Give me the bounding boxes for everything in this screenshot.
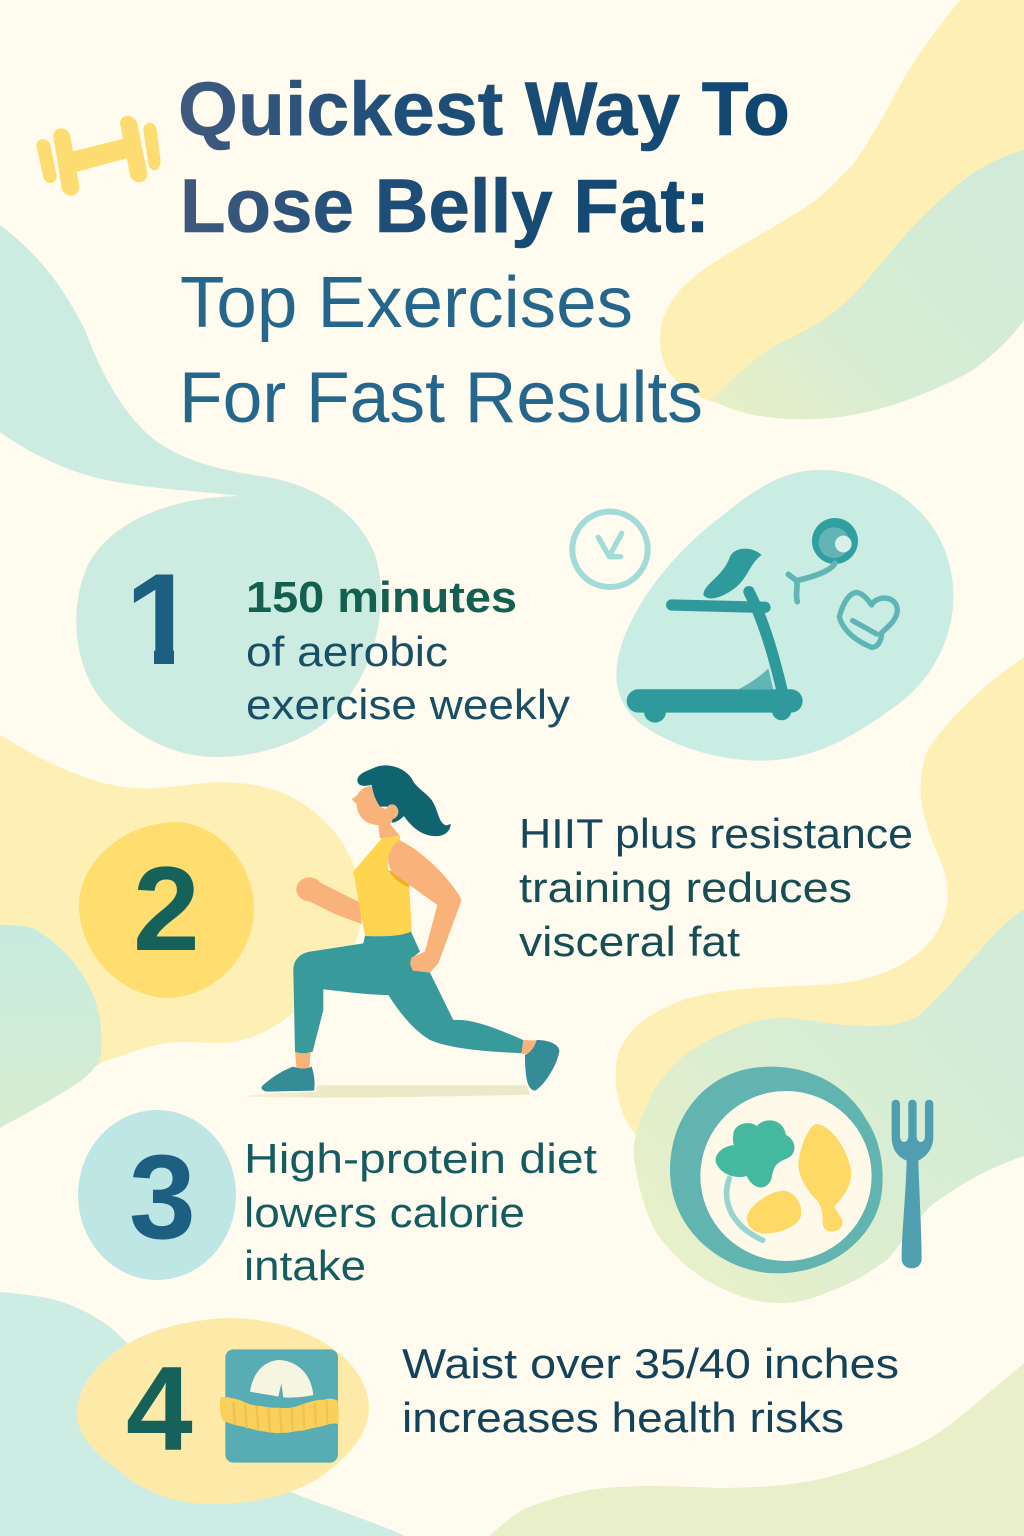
background blob: left green with circle for step 1 <box>0 225 381 757</box>
plate centre <box>700 1091 872 1261</box>
step 4 text: increases health risks <box>402 1394 844 1441</box>
step 1 text: of aerobic <box>246 628 448 675</box>
step 4 blob <box>77 1318 369 1504</box>
hair <box>357 765 451 836</box>
tank top <box>353 835 412 936</box>
background blob: bottom left green <box>0 1292 405 1536</box>
background blob: right green around plate <box>634 909 1024 1303</box>
step 2 text <box>519 810 913 965</box>
ear <box>386 804 398 819</box>
background blob: top right green <box>712 150 1024 419</box>
illustration: woman doing lunge <box>243 765 559 1098</box>
step 2 circle <box>79 822 254 998</box>
step 3 circle <box>78 1110 236 1280</box>
step 1 text: 150 minutes <box>246 573 517 622</box>
front arm <box>296 877 362 924</box>
icon: plate of food with fork <box>670 1067 933 1273</box>
background blob: left lower green <box>0 925 102 1128</box>
leggings <box>293 932 523 1053</box>
background blob: left yellow <box>0 735 363 1128</box>
fork <box>892 1100 933 1268</box>
back arm and hand <box>388 840 462 973</box>
step 2 number: 2 <box>133 842 200 976</box>
treadmill blob background <box>616 470 953 761</box>
background blob: bottom right yellow-green <box>490 1363 1024 1536</box>
chicken drumstick <box>798 1124 851 1232</box>
measuring tape <box>220 1397 339 1433</box>
lemon <box>747 1191 801 1233</box>
icon: clock <box>572 512 648 587</box>
step 4 number: 4 <box>126 1342 193 1476</box>
title <box>178 67 790 438</box>
shoes <box>261 1067 315 1092</box>
ground shadow <box>243 1085 530 1098</box>
step 1 number: 1 <box>125 546 197 692</box>
leafy greens <box>716 1120 794 1187</box>
background blob: top right yellow <box>660 0 1024 417</box>
icon: scale with measuring tape <box>220 1349 339 1463</box>
step 2 text: visceral fat <box>519 918 740 965</box>
step 3 text <box>244 1135 597 1289</box>
icon: boxing glove <box>839 593 897 647</box>
title: For Fast Results <box>179 358 703 438</box>
step 2 text: training reduces <box>519 864 852 911</box>
step 3 text: intake <box>244 1242 366 1289</box>
background blob: right yellow <box>616 657 1024 1140</box>
stem arc <box>727 1178 763 1240</box>
icon: treadmill <box>627 549 803 723</box>
step 4 text: Waist over 35/40 inches <box>402 1340 899 1387</box>
icon: dumbbell <box>36 116 161 196</box>
title: Top Exercises <box>180 263 633 343</box>
step 1 text <box>246 573 570 728</box>
icon: ball <box>788 518 858 602</box>
step 3 text: lowers calorie <box>244 1189 525 1236</box>
step 4 text <box>402 1340 899 1441</box>
title: Lose Belly Fat: <box>180 164 710 249</box>
step 3 number: 3 <box>129 1130 196 1264</box>
step 1 text: exercise weekly <box>246 681 570 728</box>
plate rim <box>670 1067 883 1273</box>
step 2 text: HIIT plus resistance <box>519 810 913 857</box>
ankles <box>295 1040 538 1069</box>
head and neck <box>352 786 400 838</box>
icon group: treadmill with clock, ball and glove <box>572 470 953 761</box>
scale dial <box>250 1360 313 1398</box>
step 3 text: High-protein diet <box>244 1135 597 1182</box>
title: Quickest Way To <box>178 67 790 152</box>
